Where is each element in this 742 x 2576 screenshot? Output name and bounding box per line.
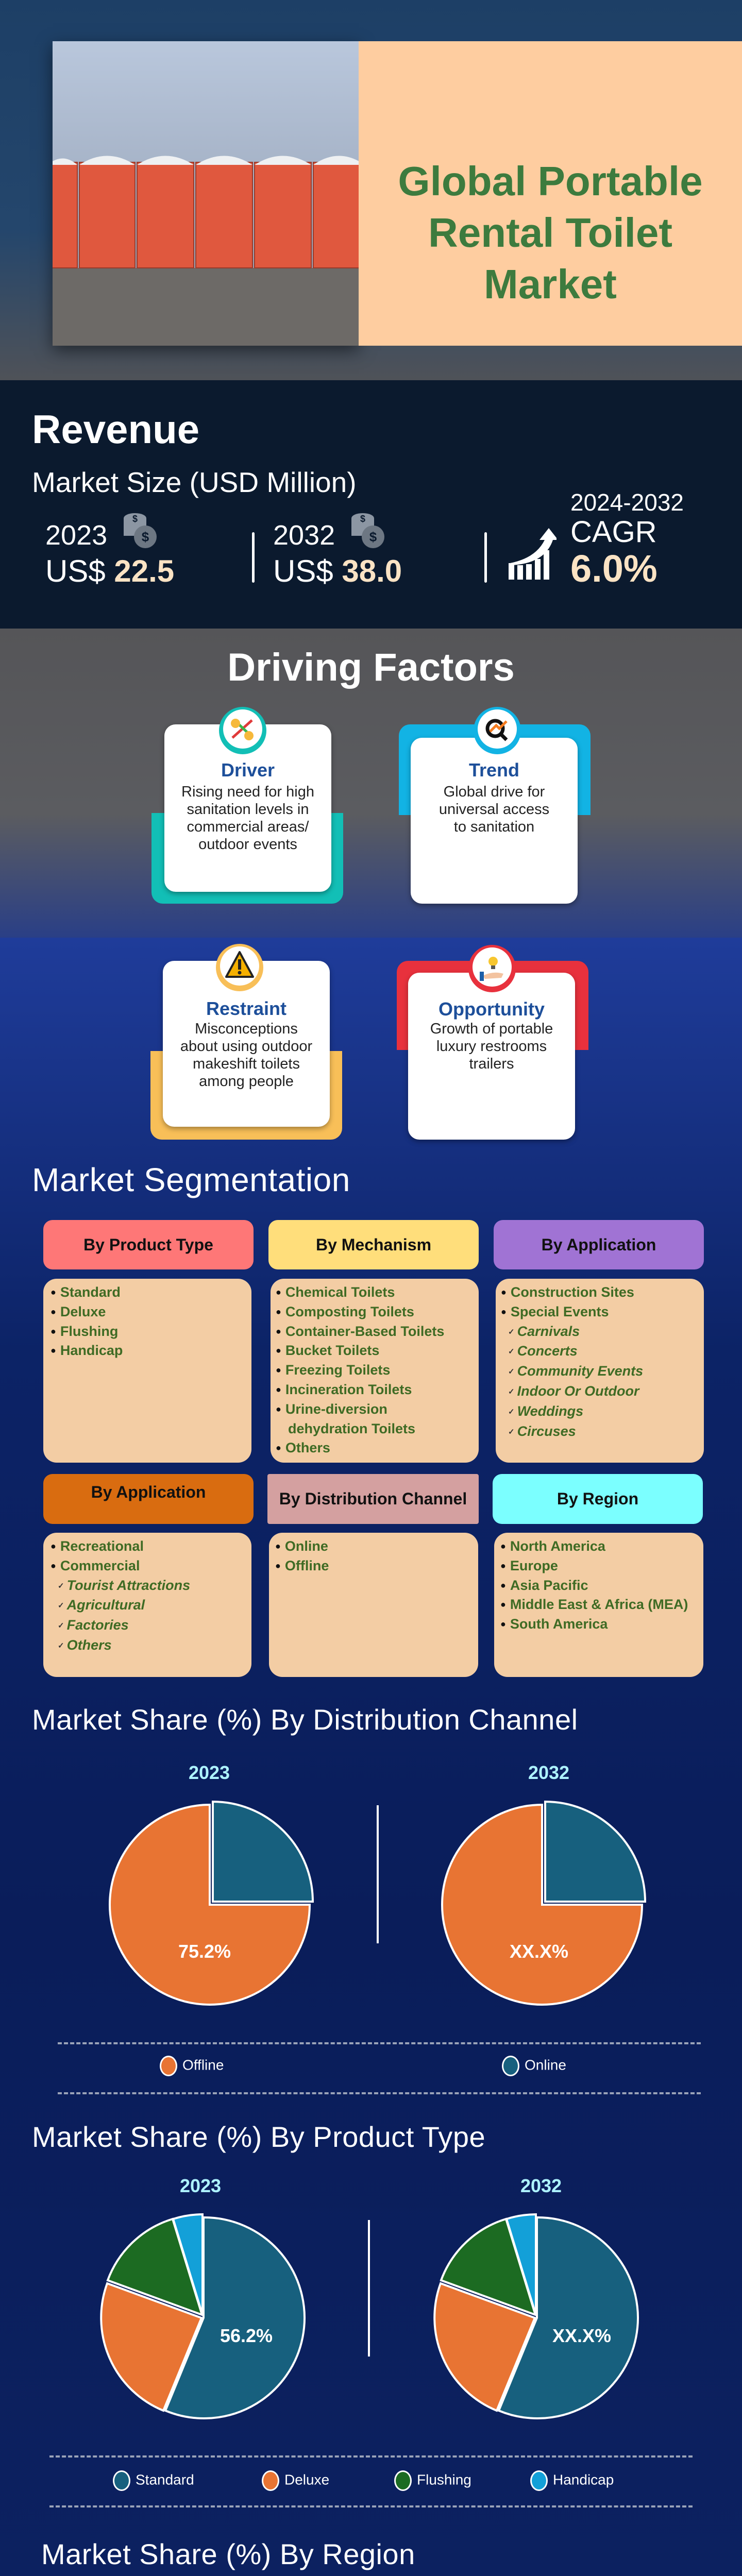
panel: opportunity: Growth of portable xyxy=(430,1021,553,1037)
segment: by application: Concerts xyxy=(517,1343,578,1359)
icon: warning xyxy=(216,944,263,991)
segment: by distribution channel xyxy=(267,1474,479,1677)
pie 2023 xyxy=(101,2214,305,2418)
chart: distribution pies xyxy=(109,1762,646,2006)
segment: by mechanism: Bucket Toilets xyxy=(285,1343,379,1358)
panel: opportunity xyxy=(397,945,588,1144)
title box xyxy=(359,41,742,346)
segment: by application: Special Events xyxy=(511,1304,609,1319)
revenue panel xyxy=(0,380,742,629)
panel: opportunity: trailers xyxy=(469,1056,514,1072)
segment: by application (end use): Tourist Attractions xyxy=(67,1578,190,1593)
segment: by application xyxy=(494,1220,704,1463)
2023 value: 2023 xyxy=(45,520,107,551)
segment: by product type: Deluxe xyxy=(60,1304,106,1319)
legend: product type: Flushing xyxy=(417,2471,471,2487)
pie 2032: XX.X% xyxy=(552,2325,611,2346)
pie 2032: XX.X% xyxy=(510,1941,568,1962)
legend: product type: Handicap xyxy=(553,2471,614,2487)
segment: by mechanism: Composting Toilets xyxy=(285,1304,414,1319)
segment: by application: By Application xyxy=(542,1235,656,1254)
legend: product type: Standard xyxy=(136,2471,194,2487)
segment: by region: North America xyxy=(510,1538,605,1554)
segment: by product type: Flushing xyxy=(60,1324,118,1339)
segment: by application: Weddings xyxy=(517,1403,583,1419)
segment: by application: Community Events xyxy=(517,1363,643,1379)
segment: by region: South America xyxy=(510,1616,608,1632)
segment: by region: By Region xyxy=(557,1489,638,1508)
heading: market segmentation: Market Segmentation xyxy=(32,1161,350,1198)
segment: by product type: Standard xyxy=(60,1284,121,1300)
icon: driver xyxy=(219,707,266,754)
segment: by region: Europe xyxy=(510,1558,558,1573)
CAGR: CAGR xyxy=(570,515,657,549)
chart: distribution pies: 2032 xyxy=(528,1762,569,1783)
segment: by application: Indoor Or Outdoor xyxy=(517,1383,639,1399)
segment: by product type: Handicap xyxy=(60,1343,123,1358)
segment: by application (end use): Others xyxy=(67,1637,112,1653)
segment: by application (end use): Recreational xyxy=(60,1538,144,1554)
segment: by application: Circuses xyxy=(517,1423,576,1439)
CAGR: 6.0% xyxy=(570,547,657,590)
panel: trend: Trend xyxy=(469,759,519,781)
segment: by application (end use): Factories xyxy=(67,1617,129,1633)
panel: restraint: makeshift toilets xyxy=(193,1056,300,1072)
segment: by distribution channel: Offline xyxy=(285,1558,329,1573)
title box: Global Portable xyxy=(398,158,703,204)
title box: Rental Toilet xyxy=(428,210,672,256)
segment: by application (end use) xyxy=(43,1474,254,1677)
panel: trend: to sanitation xyxy=(454,819,534,835)
market size label: Market Size (USD Million) xyxy=(32,466,357,498)
panel: driver: Driver xyxy=(221,759,275,781)
panel: trend: Global drive for xyxy=(444,784,545,800)
segment: by mechanism xyxy=(268,1220,479,1463)
panel: opportunity: luxury restrooms xyxy=(436,1038,547,1055)
icon: coins xyxy=(351,513,384,548)
segment: by region: Asia Pacific xyxy=(510,1578,588,1593)
panel: opportunity: Opportunity xyxy=(439,998,545,1020)
segment: by application (end use): Commercial xyxy=(60,1558,140,1573)
segment: by mechanism: By Mechanism xyxy=(316,1235,431,1254)
revenue heading: Revenue xyxy=(32,406,199,452)
panel: trend: universal access xyxy=(439,801,549,818)
panel: restraint: Restraint xyxy=(206,998,286,1019)
segment: by application: Carnivals xyxy=(517,1324,580,1339)
segment: by mechanism: Incineration Toilets xyxy=(285,1382,412,1397)
legend: distribution: Online xyxy=(525,2057,566,2073)
panel: driver: sanitation levels in xyxy=(187,801,309,818)
2032 value: US$ 38.0 xyxy=(273,554,402,588)
segment: by mechanism: Others xyxy=(285,1440,330,1455)
panel: driver: outdoor events xyxy=(198,836,297,853)
pie 2032 xyxy=(434,2214,638,2418)
2032 value: 2032 xyxy=(273,520,335,551)
legend: distribution: Offline xyxy=(182,2057,224,2073)
segment: by mechanism: dehydration Toilets xyxy=(288,1421,415,1436)
CAGR: 2024-2032 xyxy=(570,489,684,516)
panel: driver xyxy=(151,707,343,904)
icon: coins: $ xyxy=(360,514,365,524)
panel: segmentation xyxy=(43,1220,704,1677)
chart: product type pies: 2032 xyxy=(520,2175,562,2196)
CAGR xyxy=(570,489,684,590)
heading: market share by region: Market Share (%) By Region xyxy=(41,2538,415,2570)
segment: by distribution channel: Online xyxy=(285,1538,328,1554)
legend: product type: Deluxe xyxy=(284,2471,329,2487)
2032 value xyxy=(273,513,402,588)
icon: coins: $ xyxy=(369,529,377,545)
segment: by application (end use): By Application xyxy=(91,1483,206,1501)
segment: by product type: By Product Type xyxy=(83,1235,213,1254)
segment: by application: Construction Sites xyxy=(511,1284,634,1300)
pie 2023: 75.2% xyxy=(178,1941,231,1962)
segment: by region: Middle East & Africa (MEA) xyxy=(510,1597,688,1612)
chart: product type pies xyxy=(100,2175,639,2419)
legend: distribution xyxy=(160,2056,566,2076)
icon: coins xyxy=(124,513,157,548)
pie 2032 xyxy=(442,1802,645,2005)
heading: driving factors: Driving Factors xyxy=(227,646,515,689)
panel: restraint xyxy=(150,944,342,1140)
segment: by mechanism: Urine-diversion xyxy=(285,1401,387,1417)
panel: restraint: Misconceptions xyxy=(195,1021,298,1037)
segment: by product type xyxy=(43,1220,254,1463)
2023 value xyxy=(45,513,174,588)
icon: trend xyxy=(474,707,520,754)
segment: by region xyxy=(493,1474,703,1677)
header photo: portable toilets xyxy=(53,41,359,346)
heading: market share by product type: Market Share (%) By Product Type xyxy=(32,2121,485,2153)
icon: growth chart xyxy=(509,528,556,580)
segment: by distribution channel: By Distribution Channel xyxy=(279,1489,467,1508)
panel: driver: Rising need for high xyxy=(181,784,314,800)
segment: by application (end use): Agricultural xyxy=(67,1597,145,1613)
2023 value: US$ 22.5 xyxy=(45,554,174,588)
segment: by mechanism: Container-Based Toilets xyxy=(285,1324,444,1339)
icon: coins: $ xyxy=(142,529,149,545)
segment: by mechanism: Freezing Toilets xyxy=(285,1362,390,1378)
segment: by mechanism: Chemical Toilets xyxy=(285,1284,395,1300)
panel: restraint: among people xyxy=(199,1073,294,1090)
title box: Market xyxy=(484,261,617,307)
panel: trend xyxy=(399,707,591,908)
pie 2023 xyxy=(110,1802,313,2005)
panel: driver: commercial areas/ xyxy=(187,819,309,835)
icon: opportunity xyxy=(469,945,515,992)
chart: product type pies: 2023 xyxy=(180,2175,221,2196)
heading: market share by distribution channel: Market Share (%) By Distribution Channel xyxy=(32,1703,578,1736)
pie 2023: 56.2% xyxy=(220,2325,273,2346)
panel: restraint: about using outdoor xyxy=(180,1038,312,1055)
legend: product type xyxy=(113,2470,614,2491)
chart: distribution pies: 2023 xyxy=(189,1762,230,1783)
icon: coins: $ xyxy=(132,514,138,524)
